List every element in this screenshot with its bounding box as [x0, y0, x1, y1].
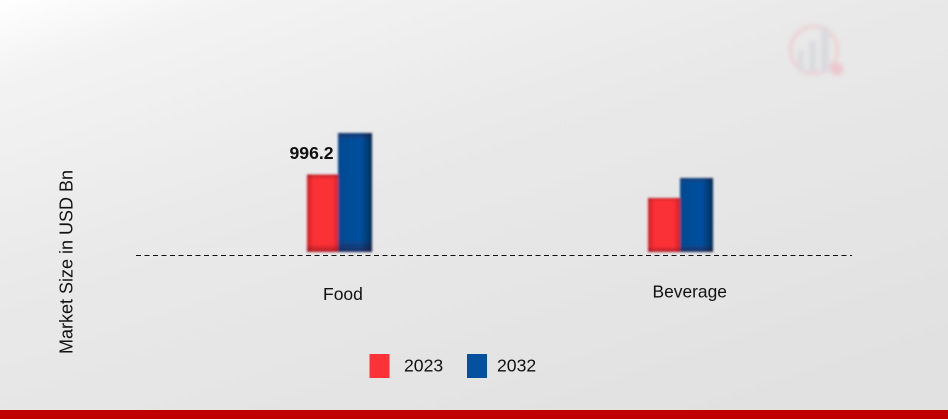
- data label: 996.2: 996.2: [290, 143, 334, 163]
- legend item: 2023: [370, 354, 443, 378]
- bars: Food: [307, 133, 372, 252]
- category label: Beverage: Beverage: [652, 282, 727, 302]
- y axis title: Market Size in USD Bn: [56, 170, 76, 354]
- axis baseline: [136, 254, 852, 256]
- bar chart: [136, 133, 852, 304]
- icon: watermark logo: [790, 26, 844, 76]
- legend item: 2032: 2032: [497, 356, 536, 376]
- legend item: 2032: [467, 354, 536, 378]
- legend item: 2023: 2023: [404, 356, 443, 376]
- legend: [370, 354, 536, 378]
- bars: Beverage: [648, 178, 713, 252]
- footer bar: [0, 410, 948, 419]
- category label: Food: Food: [323, 284, 363, 304]
